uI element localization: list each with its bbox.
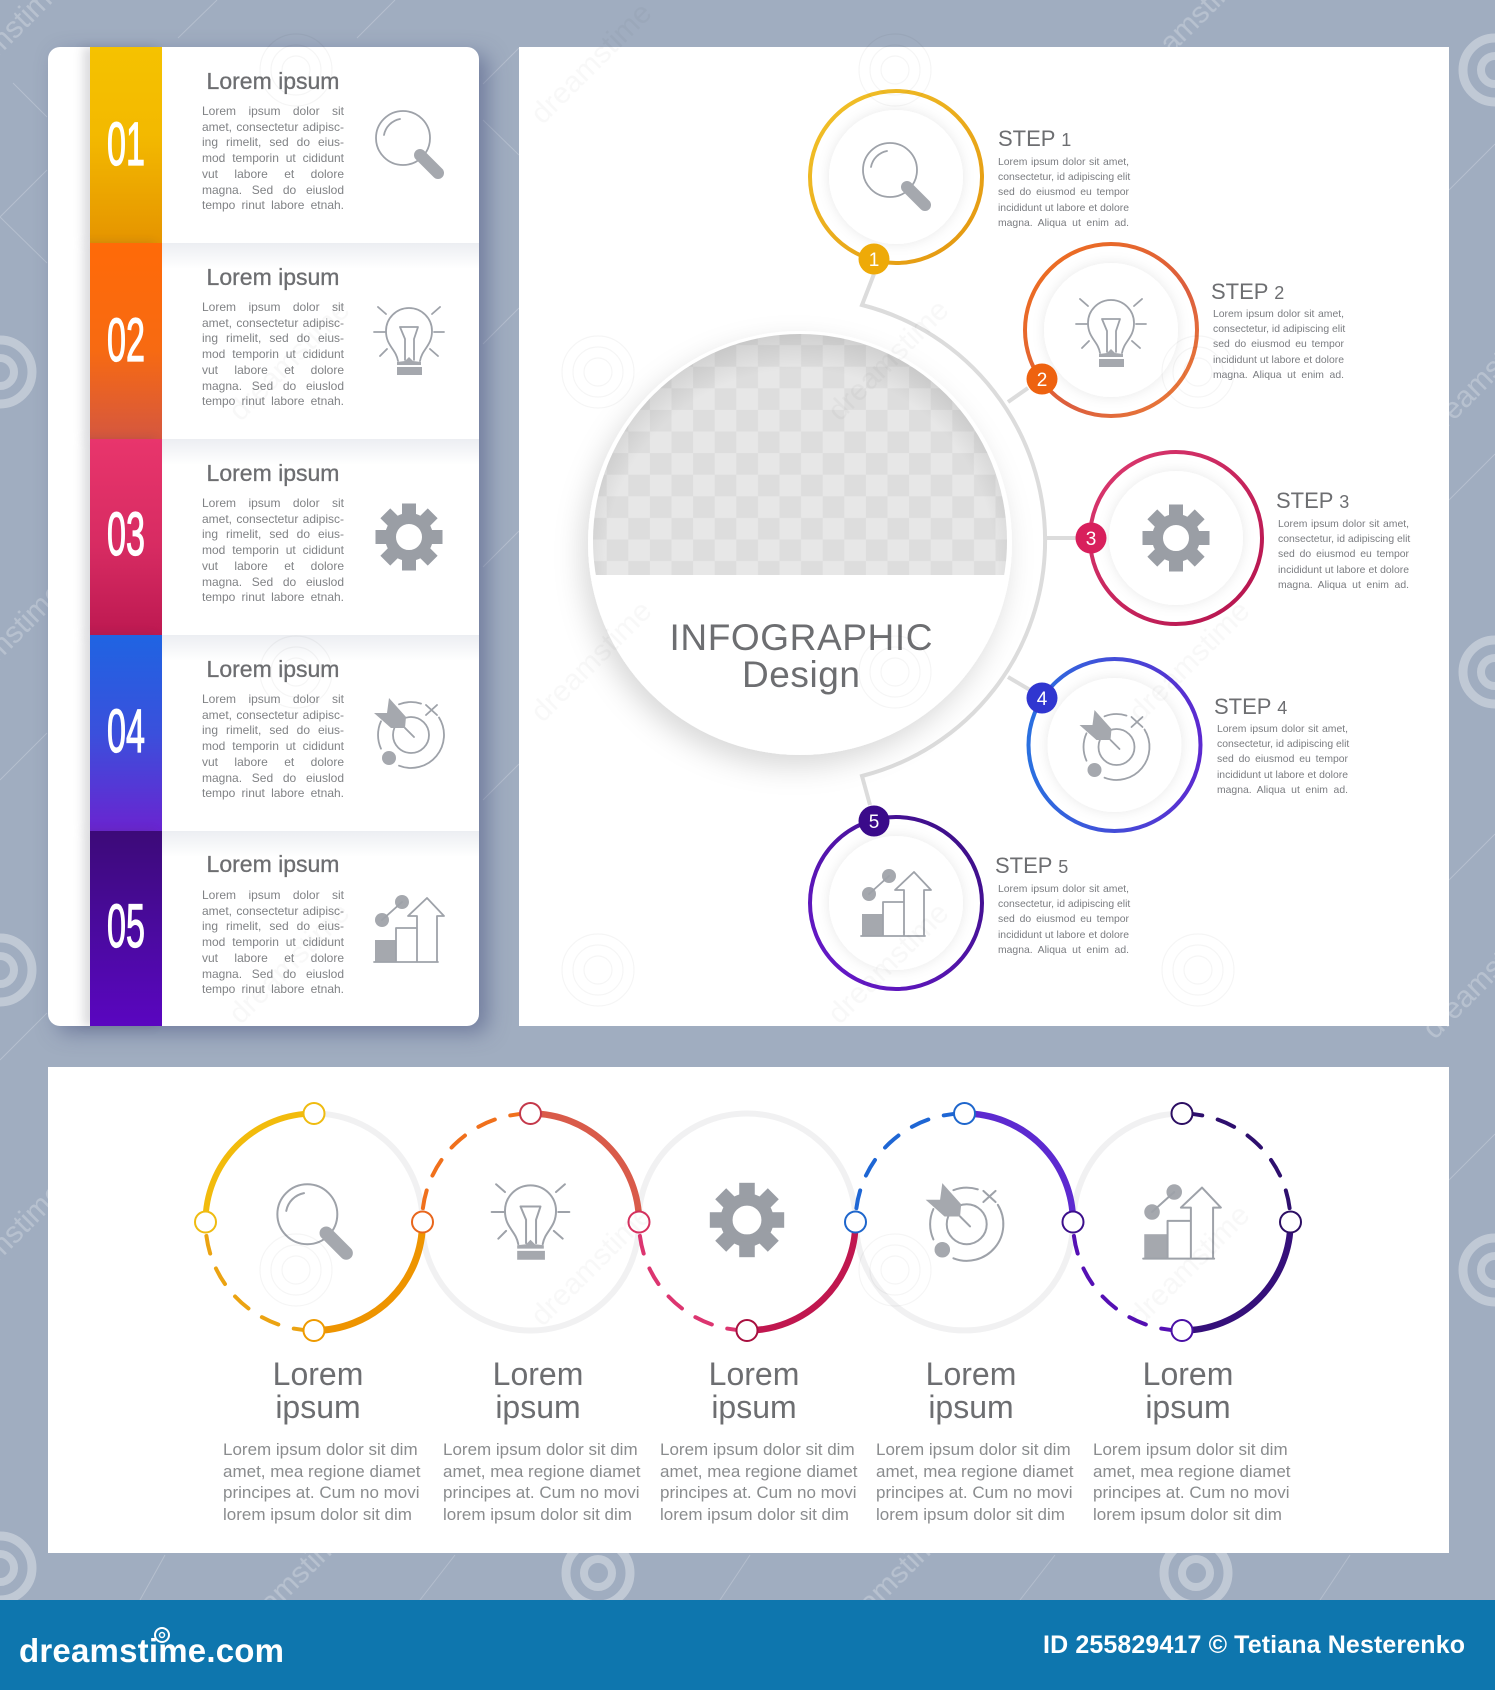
step 4 text: consectetur, id adipiscing elit xyxy=(1217,739,1349,750)
row text: vut labore et dolore xyxy=(202,167,344,181)
icon: gear xyxy=(376,504,442,570)
row text: tempo rinut labore etnah. xyxy=(202,982,344,996)
number bar 04: 04 xyxy=(107,698,145,766)
row text: mod temporin ut cididunt xyxy=(202,935,344,949)
text: dreamstime xyxy=(1122,594,1256,728)
step 5 text: Lorem ipsum dolor sit amet, xyxy=(998,884,1129,895)
step 2 text: Lorem ipsum dolor sit amet, xyxy=(1213,309,1344,320)
number bar 01 xyxy=(90,47,162,243)
list row 02 xyxy=(80,240,479,442)
column 4 title: ipsum xyxy=(928,1389,1014,1425)
number bar 03 xyxy=(90,439,162,635)
step 5 circle xyxy=(810,806,982,989)
row text: ing rimelit, sed do eius- xyxy=(202,919,344,933)
step headings: STEP 5 xyxy=(995,853,1068,878)
center title: Design xyxy=(742,654,860,695)
center title xyxy=(670,617,932,695)
step 4 text: sed do eiusmod eu tempor xyxy=(1217,754,1348,765)
step headings: STEP 3 xyxy=(1276,488,1349,513)
number bar 02 xyxy=(90,243,162,439)
text: dreamstime xyxy=(821,293,955,427)
row title: Lorem ipsum xyxy=(207,851,339,877)
list row 05 xyxy=(80,828,479,1026)
icon: magnifier xyxy=(375,110,444,179)
number bar 03: 03 xyxy=(107,501,145,569)
row text: amet, consectetur adipisc- xyxy=(202,120,344,134)
step 3 text xyxy=(1278,519,1410,591)
column 5 text: principes at. Cum no movi xyxy=(1093,1483,1290,1502)
row text xyxy=(202,104,344,212)
ring 5 xyxy=(1062,1103,1301,1341)
icon: target xyxy=(374,698,445,769)
footer bar xyxy=(0,1600,1495,1690)
connector lines xyxy=(862,274,1078,805)
step 5 text: consectetur, id adipiscing elit xyxy=(998,899,1130,910)
column 2 text: lorem ipsum dolor sit dim xyxy=(443,1505,632,1524)
row text: tempo rinut labore etnah. xyxy=(202,786,344,800)
row text: ing rimelit, sed do eius- xyxy=(202,331,344,345)
column 1 text xyxy=(223,1440,420,1524)
row text: magna. Sed do eiuslod xyxy=(202,967,344,981)
list row 03 xyxy=(80,436,479,638)
column 5 text: lorem ipsum dolor sit dim xyxy=(1093,1505,1282,1524)
row text: ing rimelit, sed do eius- xyxy=(202,723,344,737)
step 5 text xyxy=(998,884,1130,956)
row title: Lorem ipsum xyxy=(207,656,339,682)
step 2 text: magna. Aliqua ut enim ad. xyxy=(1213,370,1344,381)
row text: vut labore et dolore xyxy=(202,363,344,377)
row text: magna. Sed do eiuslod xyxy=(202,575,344,589)
number bar 02: 02 xyxy=(107,307,145,375)
row title: Lorem ipsum xyxy=(207,68,339,94)
column 3 text: principes at. Cum no movi xyxy=(660,1483,857,1502)
step 5 circle: 5 xyxy=(869,812,879,833)
list row 01 xyxy=(80,46,444,246)
text: dreamstime xyxy=(222,896,356,1030)
column 1 text: principes at. Cum no movi xyxy=(223,1483,420,1502)
row text: Lorem ipsum dolor sit xyxy=(202,300,344,314)
step 3 text: sed do eiusmod eu tempor xyxy=(1278,549,1409,560)
row text: mod temporin ut cididunt xyxy=(202,739,344,753)
step 5 text: sed do eiusmod eu tempor xyxy=(998,914,1129,925)
row text: tempo rinut labore etnah. xyxy=(202,198,344,212)
column 4 title xyxy=(926,1356,1016,1425)
column 4 text: lorem ipsum dolor sit dim xyxy=(876,1505,1065,1524)
center title: INFOGRAPHIC xyxy=(670,617,932,658)
step headings: STEP 4 xyxy=(1214,694,1287,719)
step 3 text: incididunt ut labore et dolore xyxy=(1278,565,1409,576)
step 3 text: magna. Aliqua ut enim ad. xyxy=(1278,580,1409,591)
text: dreamstime xyxy=(524,1198,658,1332)
panel: numbered list xyxy=(48,47,479,1026)
row text: mod temporin ut cididunt xyxy=(202,543,344,557)
icon: light bulb xyxy=(373,306,445,375)
column 2 text: principes at. Cum no movi xyxy=(443,1483,640,1502)
number bar 04 xyxy=(90,635,162,831)
step headings xyxy=(995,126,1349,878)
row text: ing rimelit, sed do eius- xyxy=(202,527,344,541)
step 3 text: Lorem ipsum dolor sit amet, xyxy=(1278,519,1409,530)
row text: magna. Sed do eiuslod xyxy=(202,379,344,393)
step 2 circle: 2 xyxy=(1037,370,1047,391)
row text: vut labore et dolore xyxy=(202,755,344,769)
text: dreamstime xyxy=(222,293,356,427)
icon: growth chart xyxy=(373,895,445,963)
text: dreamstime xyxy=(524,0,658,130)
row text: amet, consectetur adipisc- xyxy=(202,512,344,526)
row title: Lorem ipsum xyxy=(207,460,339,486)
column 5 text: Lorem ipsum dolor sit dim xyxy=(1093,1440,1288,1459)
column 3 title: ipsum xyxy=(711,1389,797,1425)
row text: Lorem ipsum dolor sit xyxy=(202,888,344,902)
text: dreamstime xyxy=(524,594,658,728)
step 3 circle: 3 xyxy=(1086,529,1096,550)
step 2 text xyxy=(1213,309,1346,381)
column 5 text: amet, mea regione diamet xyxy=(1093,1462,1290,1481)
ring 4 xyxy=(845,1103,1073,1261)
row text: Lorem ipsum dolor sit xyxy=(202,496,344,510)
row text: vut labore et dolore xyxy=(202,559,344,573)
step 2 circle xyxy=(1025,244,1197,416)
row text: Lorem ipsum dolor sit xyxy=(202,104,344,118)
row text: vut labore et dolore xyxy=(202,951,344,965)
column 3 text xyxy=(660,1440,858,1524)
text: dreamstime xyxy=(821,896,955,1030)
number bar 05: 05 xyxy=(107,893,145,961)
row text: magna. Sed do eiuslod xyxy=(202,771,344,785)
column 5 title xyxy=(1143,1356,1233,1425)
column 4 text: amet, mea regione diamet xyxy=(876,1462,1074,1481)
step 4 text: Lorem ipsum dolor sit amet, xyxy=(1217,724,1348,735)
ring 3 xyxy=(628,1183,856,1341)
step 4 circle: 4 xyxy=(1037,689,1048,710)
row text xyxy=(202,888,344,996)
panel: radial steps xyxy=(519,47,1449,1026)
step 1 text xyxy=(998,157,1130,229)
row text xyxy=(202,692,344,800)
column 1 text: Lorem ipsum dolor sit dim xyxy=(223,1440,418,1459)
step 1 circle xyxy=(810,91,982,274)
step 1 circle: 1 xyxy=(869,250,879,271)
number bar 05 xyxy=(90,831,162,1026)
step 4 text xyxy=(1217,724,1350,796)
row title: Lorem ipsum xyxy=(207,264,339,290)
ring 2 xyxy=(412,1103,639,1260)
row text xyxy=(202,496,344,604)
column 2 text: Lorem ipsum dolor sit dim xyxy=(443,1440,638,1459)
column 1 title: Lorem xyxy=(273,1356,363,1392)
step 4 text: incididunt ut labore et dolore xyxy=(1217,770,1348,781)
column 2 title: Lorem xyxy=(493,1356,583,1392)
text: dreamstime xyxy=(821,1516,955,1650)
step 2 text: sed do eiusmod eu tempor xyxy=(1213,339,1344,350)
list row 04 xyxy=(80,632,479,834)
row text: amet, consectetur adipisc- xyxy=(202,316,344,330)
ring 1 xyxy=(195,1103,422,1341)
column 3 text: amet, mea regione diamet xyxy=(660,1462,858,1481)
column 3 text: Lorem ipsum dolor sit dim xyxy=(660,1440,855,1459)
row text: mod temporin ut cididunt xyxy=(202,347,344,361)
row text: tempo rinut labore etnah. xyxy=(202,394,344,408)
column 2 text: amet, mea regione diamet xyxy=(443,1462,640,1481)
column 4 text: Lorem ipsum dolor sit dim xyxy=(876,1440,1071,1459)
column 3 text: lorem ipsum dolor sit dim xyxy=(660,1505,849,1524)
number bar 01: 01 xyxy=(107,111,145,179)
column 3 title xyxy=(709,1356,799,1425)
column 1 text: amet, mea regione diamet xyxy=(223,1462,420,1481)
step 3 circle xyxy=(1076,452,1262,624)
text: dreamstime xyxy=(222,1516,356,1650)
base ring arcs xyxy=(314,1114,1182,1330)
row text xyxy=(202,300,344,408)
row text: ing rimelit, sed do eius- xyxy=(202,135,344,149)
step 1 text: sed do eiusmod eu tempor xyxy=(998,187,1129,198)
step 5 text: incididunt ut labore et dolore xyxy=(998,930,1129,941)
column 1 title xyxy=(273,1356,363,1425)
step 3 text: consectetur, id adipiscing elit xyxy=(1278,534,1410,545)
column 5 title: Lorem xyxy=(1143,1356,1233,1392)
step 1 text: magna. Aliqua ut enim ad. xyxy=(998,218,1129,229)
step 2 text: incididunt ut labore et dolore xyxy=(1213,355,1344,366)
column 4 text: principes at. Cum no movi xyxy=(876,1483,1073,1502)
row text: tempo rinut labore etnah. xyxy=(202,590,344,604)
column 3 title: Lorem xyxy=(709,1356,799,1392)
step headings: STEP 2 xyxy=(1211,279,1284,304)
footer logo: dreamstime.com xyxy=(19,1632,284,1669)
step 1 text: consectetur, id adipiscing elit xyxy=(998,172,1130,183)
column 1 text: lorem ipsum dolor sit dim xyxy=(223,1505,412,1524)
footer credit: ID 255829417 © Tetiana Nesterenko xyxy=(1043,1631,1465,1659)
step 1 text: incididunt ut labore et dolore xyxy=(998,203,1129,214)
step headings: STEP 1 xyxy=(998,126,1071,151)
column 5 text xyxy=(1093,1440,1290,1524)
step 4 circle xyxy=(1026,659,1200,831)
panel: linked circles timeline xyxy=(48,1067,1449,1553)
row text: Lorem ipsum dolor sit xyxy=(202,692,344,706)
row text: amet, consectetur adipisc- xyxy=(202,708,344,722)
column 2 text xyxy=(443,1440,640,1524)
column 2 title xyxy=(493,1356,583,1425)
step 1 text: Lorem ipsum dolor sit amet, xyxy=(998,157,1129,168)
text: dreamstime xyxy=(1122,1198,1256,1332)
step 2 text: consectetur, id adipiscing elit xyxy=(1213,324,1345,335)
column 5 title: ipsum xyxy=(1145,1389,1231,1425)
row text: magna. Sed do eiuslod xyxy=(202,183,344,197)
column 1 title: ipsum xyxy=(275,1389,361,1425)
step 5 text: magna. Aliqua ut enim ad. xyxy=(998,945,1129,956)
center image circle xyxy=(588,330,1012,755)
row text: mod temporin ut cididunt xyxy=(202,151,344,165)
column 2 title: ipsum xyxy=(495,1389,581,1425)
column 4 text xyxy=(876,1440,1074,1524)
column 4 title: Lorem xyxy=(926,1356,1016,1392)
row text: amet, consectetur adipisc- xyxy=(202,904,344,918)
step 4 text: magna. Aliqua ut enim ad. xyxy=(1217,785,1348,796)
